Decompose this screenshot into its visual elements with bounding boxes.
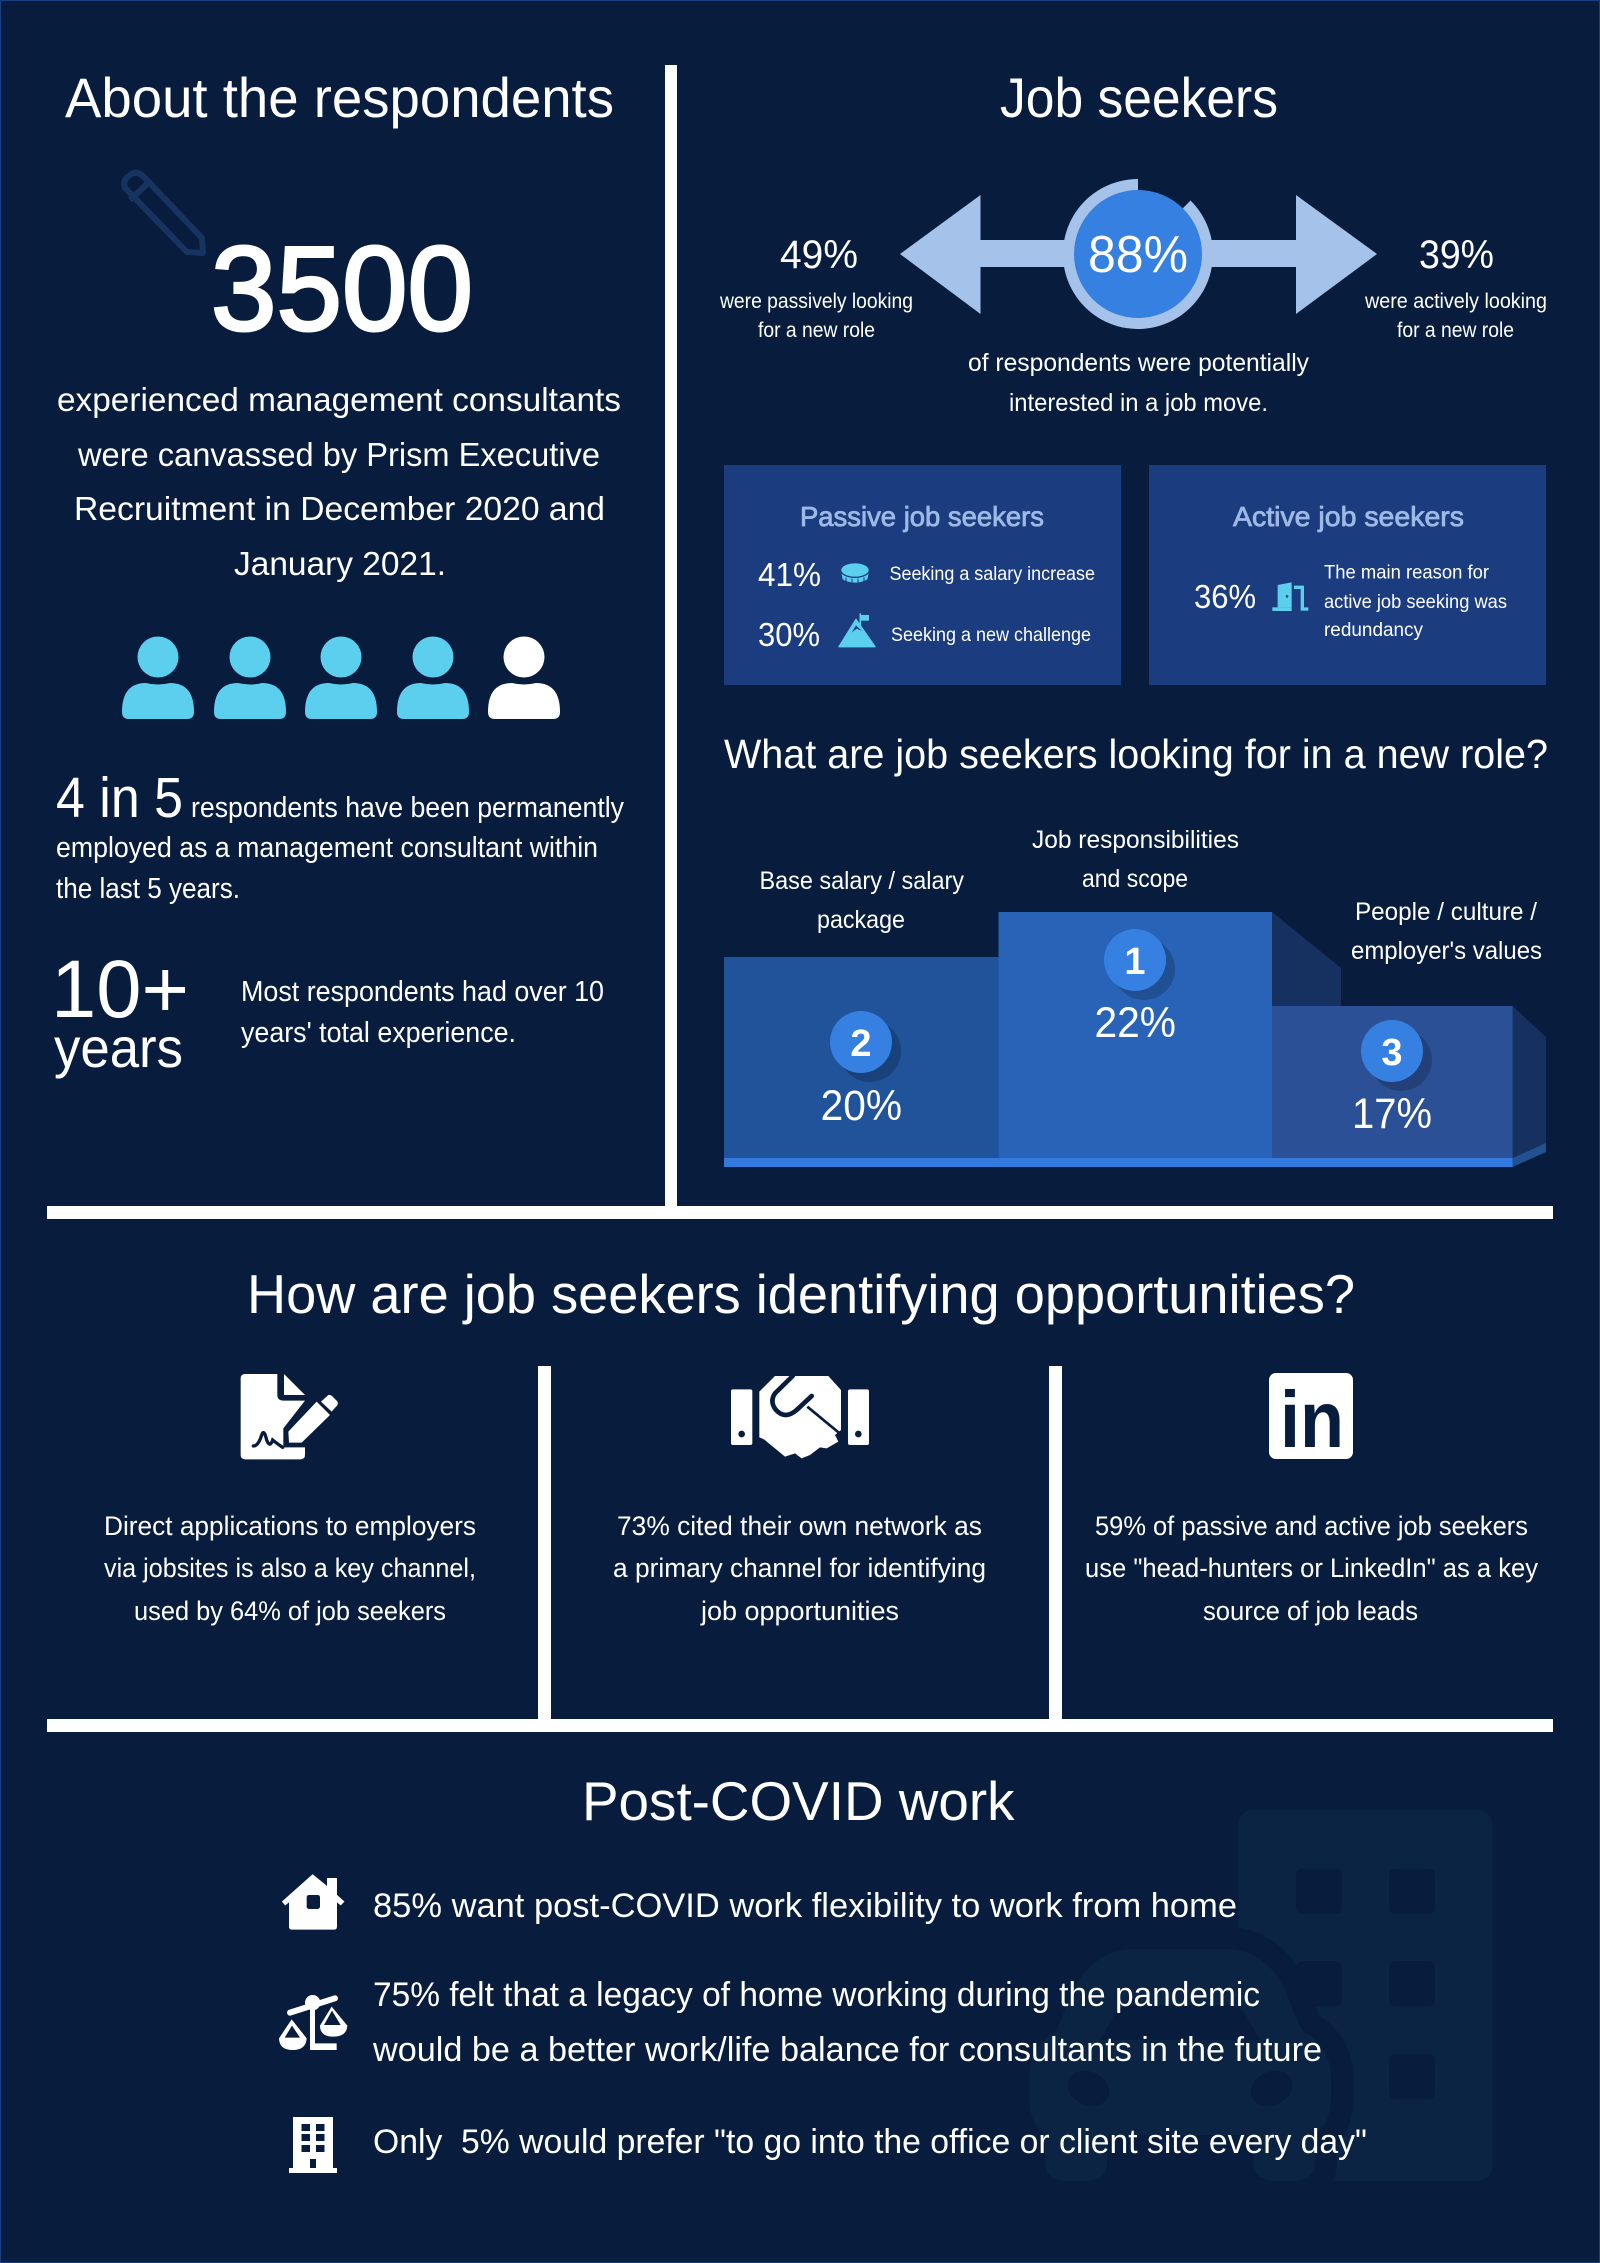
stat: 10+ years: years xyxy=(54,1016,183,1079)
bar: rank 3, 17%: 17% xyxy=(1352,1090,1432,1138)
bar: rank 1, 22%: 1 xyxy=(1124,941,1146,983)
text block: potentially interested: of respondents were potentially xyxy=(968,349,1309,377)
icon: coin xyxy=(841,563,869,584)
column: head-hunters or LinkedIn xyxy=(1085,1373,1538,1626)
label: seeking a salary increase: Seeking a salary increase xyxy=(890,563,1095,585)
bar: rank 2, 20% xyxy=(821,1011,902,1130)
big number: 3500: 3500 xyxy=(211,222,473,356)
label: job responsibilities xyxy=(1032,826,1239,893)
text block: head-hunters: use "head-hunters or LinkedIn" as a key xyxy=(1085,1553,1538,1583)
stat: 39% actively looking: were actively looking xyxy=(1364,290,1547,313)
item: work from home: 85% want post-COVID work flexibility to work from home xyxy=(373,1887,1237,1925)
panel: passive job seekers xyxy=(724,465,1121,685)
stat: 4 in 5 respondents: employed as a management consultant within xyxy=(56,832,598,864)
item: work life balance xyxy=(279,1976,1322,2069)
text block: main reason: redundancy xyxy=(1324,619,1423,641)
text block: head-hunters: source of job leads xyxy=(1203,1596,1418,1626)
item: work from home xyxy=(282,1875,1237,1929)
item: work life balance: would be a better work/life balance for consultants in the future xyxy=(372,2031,1322,2069)
text block: main reason xyxy=(1324,562,1507,641)
text block: survey description: experienced management consultants xyxy=(57,381,621,418)
chart: 88% radial ring: 88% xyxy=(1088,226,1188,284)
icon: signed document xyxy=(241,1374,338,1459)
label: base salary xyxy=(760,867,964,934)
stat: 49% passively looking: 49% xyxy=(780,233,858,277)
heading: what are job seekers looking for: What are job seekers looking for in a new role? xyxy=(724,731,1548,777)
panel: active job seekers xyxy=(1149,465,1546,685)
label: people culture values xyxy=(1351,898,1542,965)
icon: pencil watermark xyxy=(124,173,203,253)
stat: 4 in 5 respondents: respondents have been permanently xyxy=(191,792,624,824)
stat: 10+ years xyxy=(51,944,604,1079)
label: people culture values: People / culture / xyxy=(1355,898,1537,926)
bar: rank 3, 17%: 3 xyxy=(1381,1032,1403,1074)
label: base salary: package xyxy=(817,906,905,934)
text block: main reason: The main reason for xyxy=(1324,562,1489,584)
bar: rank 3, 17% xyxy=(1352,1020,1432,1138)
icon: office building xyxy=(289,2117,337,2173)
column: own network xyxy=(613,1376,986,1626)
stat: 39% actively looking xyxy=(1364,233,1547,342)
heading: how are job seekers identifying opportunities: How are job seekers identifying opportunities? xyxy=(247,1263,1355,1325)
bar: rank 1, 22% xyxy=(1094,929,1176,1047)
label: base salary: Base salary / salary xyxy=(760,867,964,895)
arrow: left and right double arrow xyxy=(900,195,1377,314)
chart: podium bar chart xyxy=(724,826,1546,1167)
label: job responsibilities: Job responsibilities xyxy=(1032,826,1239,854)
panel: identifying opportunities xyxy=(104,1263,1538,1626)
stat: 41% salary increase: 41% xyxy=(758,556,821,593)
bar: rank 1, 22%: 22% xyxy=(1094,999,1176,1047)
icon: house xyxy=(282,1875,344,1929)
stat: 10+ years: 10+ xyxy=(51,944,189,1035)
text block: head-hunters xyxy=(1085,1511,1538,1626)
item: work life balance: 75% felt that a legacy of home working during the pandemic xyxy=(373,1976,1260,2014)
text block: direct applications: Direct applications to employers xyxy=(104,1511,476,1541)
label: seeking a new challenge: Seeking a new challenge xyxy=(891,624,1091,646)
stat: 36% redundancy: 36% xyxy=(1194,578,1256,615)
text block: direct applications: used by 64% of job seekers xyxy=(134,1596,446,1626)
heading: post-covid work: Post-COVID work xyxy=(582,1770,1015,1832)
heading: passive job seekers: Passive job seekers xyxy=(800,501,1044,532)
text block: survey description xyxy=(57,381,621,582)
text block: survey description: January 2021. xyxy=(234,545,446,582)
heading: active job seekers: Active job seekers xyxy=(1233,501,1464,532)
label: job responsibilities: and scope xyxy=(1082,865,1188,893)
stat: 49% passively looking xyxy=(719,233,913,342)
text block: survey description: were canvassed by Prism Executive xyxy=(77,436,600,473)
label: people culture values: employer's values xyxy=(1351,937,1542,965)
bar: rank 2, 20%: 2 xyxy=(850,1023,872,1065)
text block: head-hunters: 59% of passive and active job seekers xyxy=(1095,1511,1528,1541)
text block: direct applications: via jobsites is also a key channel, xyxy=(104,1553,476,1583)
chart: 88% radial ring xyxy=(1063,179,1213,329)
watermark: building and car xyxy=(1029,1810,1493,2181)
panel: job seekers xyxy=(719,66,1548,1167)
bar: rank 2, 20%: 20% xyxy=(821,1082,902,1130)
stat: 4 in 5 respondents: the last 5 years. xyxy=(56,873,240,905)
text block: own network: 73% cited their own network as xyxy=(617,1511,982,1541)
stat: 39% actively looking: for a new role xyxy=(1397,319,1514,342)
icon: open door xyxy=(1272,582,1308,611)
stat: 4 in 5 respondents xyxy=(56,766,624,905)
text block: own network xyxy=(613,1511,986,1626)
panel: post-covid work xyxy=(279,1770,1493,2181)
stat: 49% passively looking: were passively looking xyxy=(719,290,913,313)
text block: potentially interested xyxy=(968,349,1309,417)
icon: linkedin: in xyxy=(1280,1375,1344,1464)
stat: 39% actively looking: 39% xyxy=(1419,233,1494,277)
text block: main reason: active job seeking was xyxy=(1324,591,1507,613)
heading: about the respondents: About the respondents xyxy=(65,66,614,129)
item: office every day: Only 5% would prefer "to go into the office or client site every day" xyxy=(373,2123,1367,2161)
icon: balance scales xyxy=(279,1995,347,2050)
stat: 10+ years: years' total experience. xyxy=(241,1017,516,1049)
stat: 49% passively looking: for a new role xyxy=(758,319,875,342)
text block: own network: job opportunities xyxy=(700,1596,899,1626)
column: direct applications xyxy=(104,1374,476,1626)
stat: 30% new challenge: 30% xyxy=(758,616,820,653)
icon: handshake xyxy=(731,1376,869,1458)
text block: direct applications xyxy=(104,1511,476,1626)
text block: own network: a primary channel for identifying xyxy=(613,1553,986,1583)
icon: mountain with flag xyxy=(839,613,875,647)
panel: about the respondents xyxy=(51,66,624,1079)
text block: survey description: Recruitment in December 2020 and xyxy=(74,490,605,527)
stat: 4 in 5 respondents: 4 in 5 xyxy=(56,766,183,830)
item: office every day xyxy=(289,2117,1367,2173)
icon row: 4 of 5 people xyxy=(122,636,560,719)
stat: 10+ years: Most respondents had over 10 xyxy=(241,976,604,1008)
heading: job seekers: Job seekers xyxy=(1000,66,1278,129)
text block: potentially interested: interested in a job move. xyxy=(1009,389,1268,417)
